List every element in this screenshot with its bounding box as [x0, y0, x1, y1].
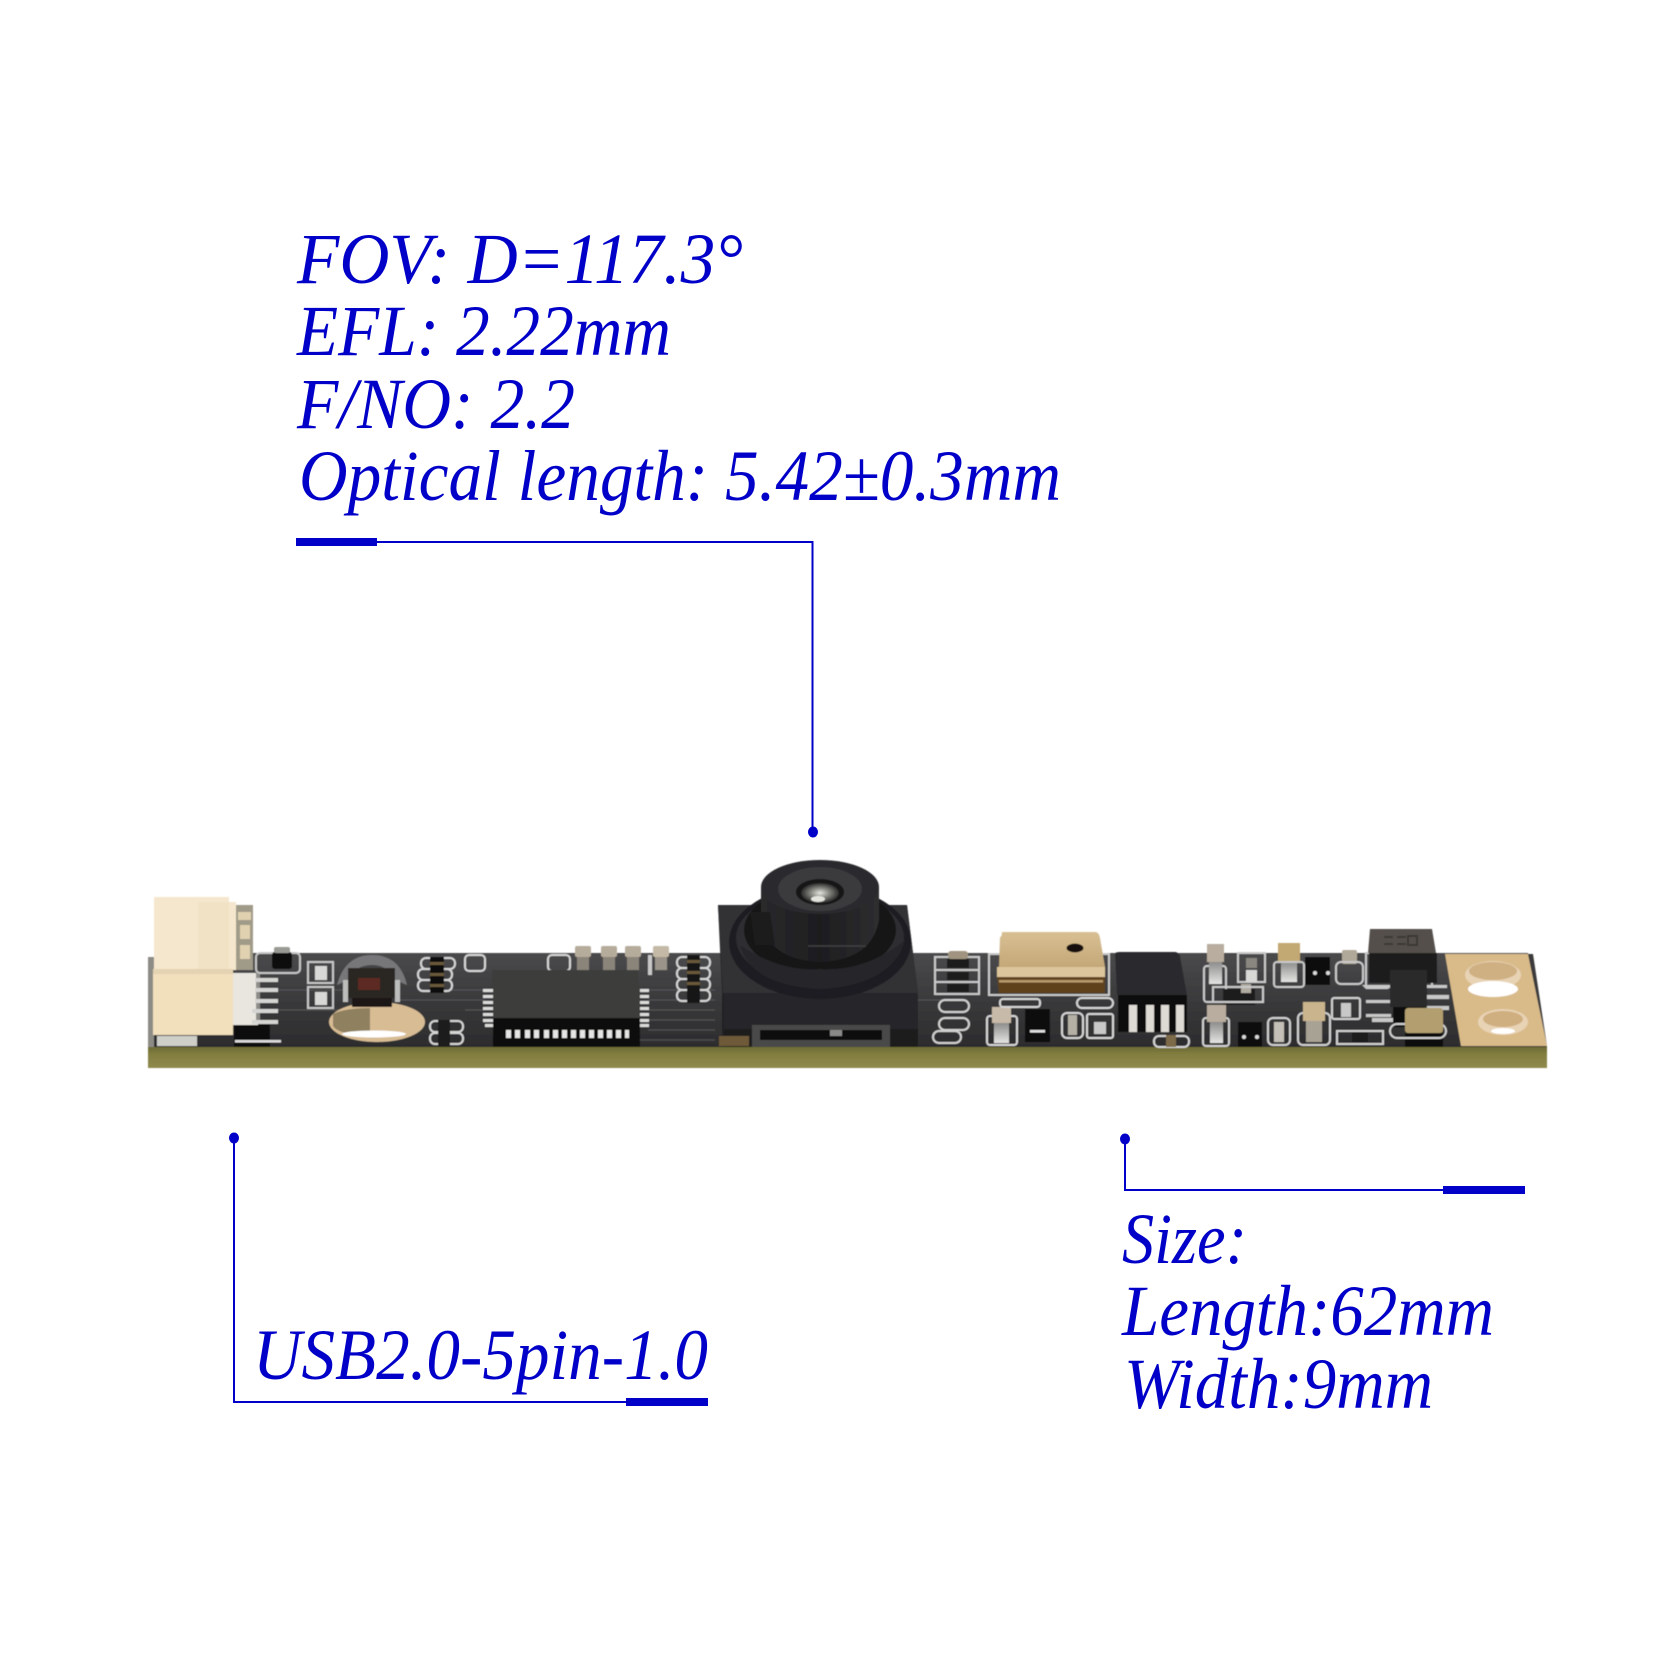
text block: optical specifications: FOV: D=117.3° [296, 219, 743, 299]
inductor and gold plated hole [329, 955, 425, 1042]
text: connector type: USB2.0-5pin-1.0 [253, 1315, 708, 1395]
microphone [989, 932, 1109, 995]
text block: board size [1121, 1199, 1494, 1424]
components under microphone [987, 998, 1113, 1045]
camera base block [718, 905, 918, 1047]
capacitors and regulators at right [1203, 943, 1383, 1047]
text block: optical specifications: EFL: 2.22mm [296, 291, 671, 371]
camera module photo [148, 860, 1547, 1068]
resistor group right of camera [933, 951, 979, 1043]
text block: optical specifications [296, 219, 1061, 516]
callout leader: board size [1120, 1134, 1525, 1194]
text block: board size: Size: [1122, 1199, 1247, 1279]
main IC chip [483, 970, 649, 1047]
PCB traces [260, 990, 945, 1040]
camera holder ring [729, 885, 911, 999]
resistor group near inductor [418, 955, 570, 1047]
left small components [256, 947, 333, 1008]
text block: board size: Width:9mm [1124, 1344, 1433, 1424]
text block: optical specifications: Optical length: 5.42±0.3mm [299, 436, 1061, 516]
SOIC chip [1115, 952, 1189, 1047]
text block: optical specifications: F/NO: 2.2 [296, 364, 575, 444]
gold mounting holes [1465, 961, 1528, 1035]
text block: board size: Length:62mm [1121, 1271, 1494, 1351]
callout leader: lens specifications [296, 538, 818, 838]
regulator chip and tantalum capacitor [1362, 970, 1449, 1047]
callout leader: connector [229, 1132, 708, 1406]
connector [148, 897, 281, 1047]
resistor group left of camera [677, 955, 710, 1003]
lens barrel [750, 860, 879, 962]
row of ceramic capacitors [575, 946, 669, 975]
PCB board [148, 953, 1547, 1068]
power inductor marked 220 [1366, 929, 1437, 987]
camera connector slot [752, 1025, 890, 1047]
camera lens module [718, 860, 918, 1047]
